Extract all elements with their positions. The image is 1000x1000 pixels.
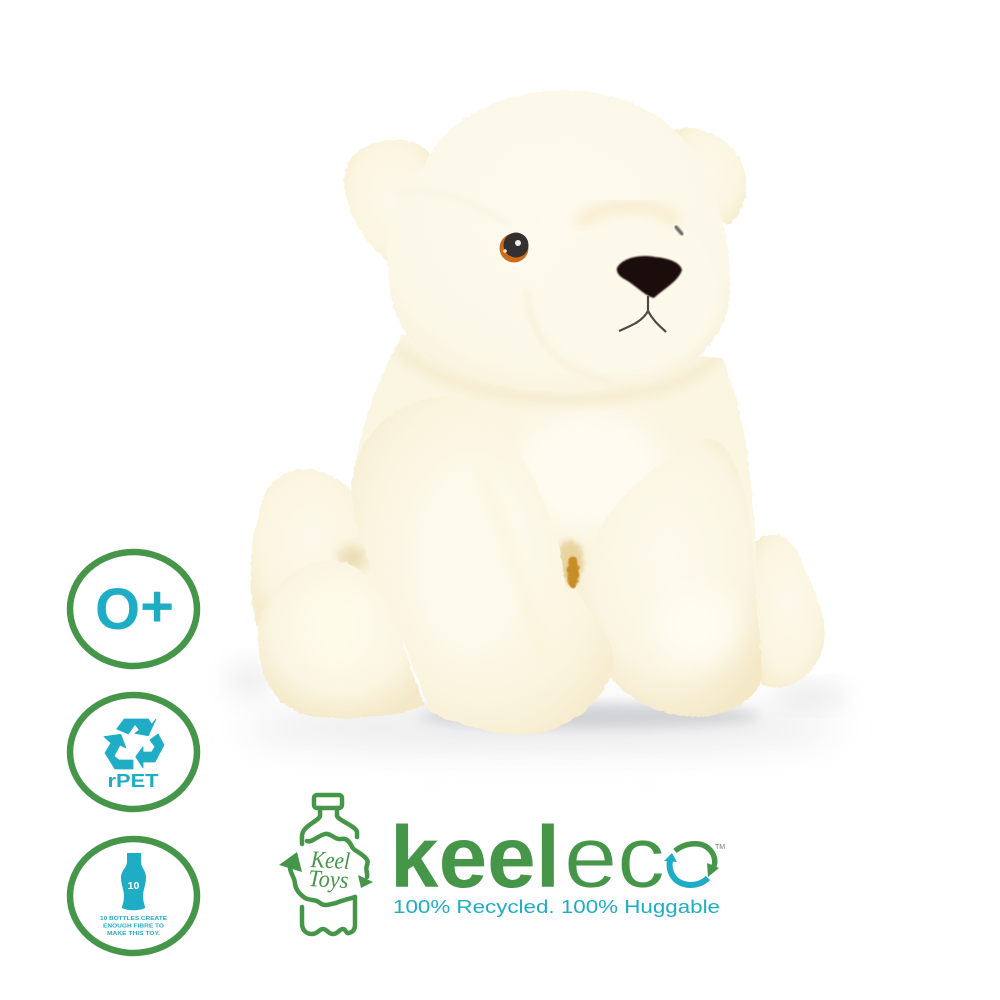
ec: ec bbox=[564, 809, 665, 906]
bottle caption bbox=[100, 916, 167, 937]
Keel Toys wordmark: Keel bbox=[309, 847, 351, 875]
left haunch bbox=[251, 469, 370, 625]
left hind foot bbox=[258, 560, 424, 718]
tagline: 100% Recycled. 100% Huggable bbox=[393, 896, 720, 917]
bear ears bbox=[344, 128, 746, 267]
bear body bbox=[251, 335, 825, 735]
collar shadow bbox=[395, 345, 725, 399]
tan hollow behind foot bbox=[337, 546, 367, 570]
bottle caption: MAKE THIS TOY. bbox=[107, 931, 160, 937]
badge: 10 bottles bbox=[70, 839, 197, 953]
logo: keeleco wordmark bbox=[390, 809, 725, 906]
plush polar bear bbox=[251, 90, 825, 735]
bottle caption: 10 BOTTLES CREATE bbox=[100, 916, 167, 922]
badge: rPET bbox=[70, 695, 197, 809]
bottle number: 10 bbox=[128, 880, 139, 892]
rPET label: rPET bbox=[108, 770, 159, 791]
bottle caption: ENOUGH FIBRE TO bbox=[103, 924, 165, 930]
bear head bbox=[388, 90, 730, 399]
trademark: TM bbox=[715, 844, 725, 851]
badge: age 0+ bbox=[70, 552, 197, 666]
age label: O bbox=[95, 577, 140, 642]
gap between front legs bbox=[556, 540, 584, 588]
logo arrows bbox=[279, 852, 302, 872]
Keel Toys wordmark bbox=[308, 847, 351, 894]
ground shadow bbox=[226, 660, 848, 750]
far eye bbox=[676, 227, 682, 234]
icon: recycling arrows bbox=[104, 719, 164, 769]
icon: o recycle arrows bbox=[670, 844, 715, 885]
Keel Toys wordmark: Toys bbox=[308, 866, 349, 894]
age label: + bbox=[140, 574, 174, 639]
mouth bbox=[619, 296, 666, 332]
nose bbox=[617, 256, 682, 298]
keel: keel bbox=[390, 809, 560, 906]
left front leg bbox=[352, 397, 614, 735]
right hind foot bbox=[750, 534, 825, 687]
right front leg bbox=[576, 438, 762, 717]
icon: small bottle bbox=[121, 853, 146, 910]
muzzle bbox=[542, 215, 718, 375]
torso bbox=[350, 335, 757, 640]
eye bbox=[498, 232, 530, 264]
logo: Keel Toys bottle bbox=[279, 795, 373, 934]
